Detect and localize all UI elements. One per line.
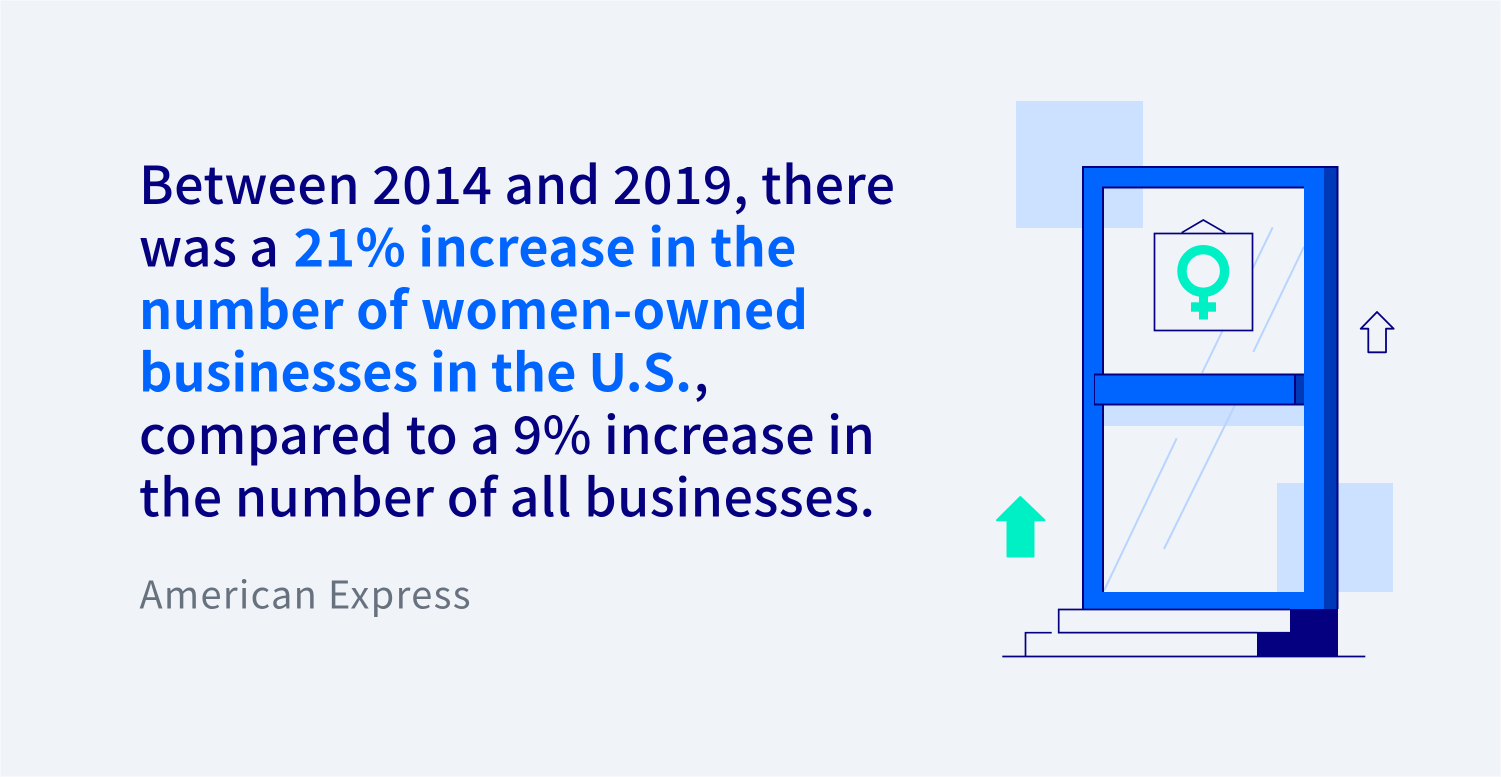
source: American Express: American Express [140,564,470,620]
statement text: number of women-owned [139,269,808,344]
icon: green up arrow [997,497,1044,556]
statement text: businesses in the U.S. [139,332,692,406]
steps [1002,609,1365,656]
statement text: was a [139,206,279,282]
statement text: 21% increase in the [294,206,796,282]
statement text: compared to a 9% increase in [139,394,875,469]
hanging sign [1154,220,1252,330]
glass reflections [1104,227,1304,591]
statement text: the number of all businesses. [139,456,875,532]
statement text [139,144,895,532]
icon: outlined up arrow [1361,312,1394,352]
glass band below bar [1103,400,1304,426]
door frame [1083,167,1338,609]
illustration: shop door [1002,101,1393,656]
statement text: , [694,332,709,406]
door handle bar [1095,374,1304,404]
background square top [1016,101,1143,228]
statement text: Between 2014 and 2019, there [139,144,895,219]
icon: female symbol [1182,250,1225,320]
background square bottom [1277,483,1393,592]
